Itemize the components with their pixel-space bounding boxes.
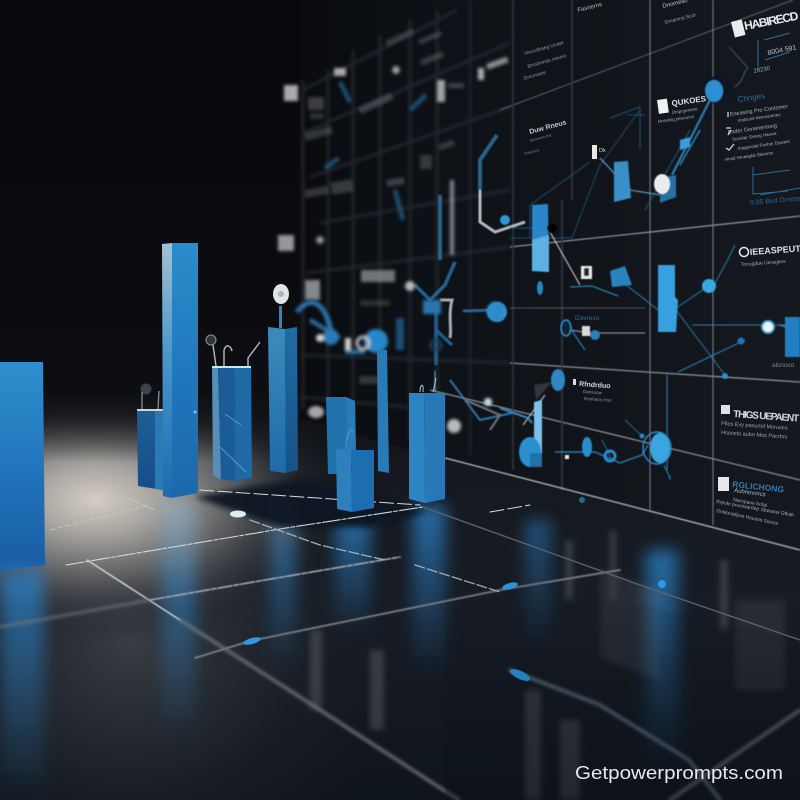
wall text: right small chart: 0.05 Bvd Ornms <box>750 196 800 207</box>
thin bar <box>377 350 389 473</box>
floor blue accents <box>230 497 666 683</box>
wall text: mid right heading <box>740 243 800 268</box>
block node with white disc <box>614 137 690 203</box>
bar: tallest <box>162 243 198 498</box>
wall text: top right details <box>753 33 797 75</box>
bar: eighth <box>409 378 445 503</box>
wall text: right lower heading: THIGS UEPAENT <box>733 409 799 425</box>
pins on bar four <box>206 335 260 366</box>
bar: sixth <box>326 397 356 474</box>
vertical bar node right <box>658 265 678 332</box>
reflections on floor <box>0 490 678 800</box>
blurred far-side wall labels and icons <box>278 28 509 384</box>
wall text: right lower heading: Hsoosto aubn Mos Pacrhrs <box>721 430 788 441</box>
bar: left foreground <box>0 362 45 571</box>
wall text: center labels: Sonenos bur <box>529 132 553 143</box>
wall text: center labels: Davresn <box>575 315 600 322</box>
wall text: right list <box>724 91 791 162</box>
wall text: top right details: 20230 <box>753 66 771 75</box>
wall grid: sharp near side <box>430 0 800 550</box>
wall grid: blurred far side <box>300 0 510 455</box>
small blue components <box>487 266 632 340</box>
wall text: center labels: Gmamnd Scor <box>664 12 697 26</box>
wall text: quad block: QUKOES <box>671 94 707 108</box>
bar: short front <box>336 430 374 512</box>
wall text: bottom right block: RGLICHONG <box>732 479 785 494</box>
watermark: Getpowerprompts.com <box>575 763 783 783</box>
wall text: top right heading <box>731 9 800 38</box>
pins on short bar <box>140 384 159 409</box>
wall text: right lower heading <box>721 405 799 441</box>
wall text: quad block: Hnsslsig pesourcs <box>657 114 695 124</box>
floor <box>0 395 800 800</box>
wall text: center labels <box>523 0 697 322</box>
wall text: top right heading: HABIRECD <box>743 9 800 33</box>
wall text: bottom right block <box>716 477 795 527</box>
wall text: mid right heading: IEEASPEUT <box>749 243 800 257</box>
wall text: right list: Eneasing Pro Contomer <box>729 104 789 118</box>
wall text: quad block: Dmprgement <box>671 106 699 115</box>
reflected wall grid on floor <box>310 530 785 800</box>
wall text: center labels: Brnshnnds meuso <box>527 53 568 70</box>
bar: dark fourth <box>212 366 252 481</box>
wall text: right list: Chnges <box>737 91 766 104</box>
floor grid lines <box>0 490 800 800</box>
wall text: center labels: Fasnerns <box>577 2 603 14</box>
wall text: bottom right block: Rrpole pounwardep Sbwanel Gfloth <box>716 499 795 519</box>
bar with disc node lower <box>519 369 565 467</box>
wall text: top right details: 8004 591 <box>767 45 797 57</box>
blurred nodes mid wall <box>297 281 505 433</box>
bar: fifth with disc <box>268 284 298 473</box>
wall text: lower center note <box>573 379 612 403</box>
wall text: mid right heading: Tonugdue Ueragkes <box>741 259 786 268</box>
network nodes on wall <box>487 75 800 467</box>
right side darkening <box>445 560 800 800</box>
block right edge <box>785 317 800 357</box>
wall text: caption near right block: alsnoco <box>772 362 795 369</box>
floor shadow band <box>195 478 425 527</box>
bar: short left <box>137 409 163 490</box>
node: large blue ring top right <box>705 75 735 105</box>
wall text: bottom right block: Aubnovorcs <box>734 488 766 498</box>
wall text: bottom right block: Naropaue bofal <box>733 497 767 509</box>
wall text: right list: maganolal Pashor Dasses <box>737 139 791 151</box>
wall text: right list: Tsondar Sveng Hawsa <box>731 131 777 142</box>
wall text: center labels: Fesonce <box>524 147 541 156</box>
vertical bar node center <box>500 204 557 272</box>
wall text: bottom right block: Gnslonsllpos Hovans Sorors <box>716 508 779 527</box>
wall text: right list: Hnod Hmeaglal Sbeoms <box>724 150 774 162</box>
wall text: right list: molouse hemsurenes <box>737 112 781 123</box>
white disc node <box>702 279 775 379</box>
wall text: lower center note: Dansuow <box>583 389 603 395</box>
ring nodes lower row <box>565 432 671 464</box>
wall text: center labels: Duw Rneus <box>529 119 567 136</box>
wall panel <box>300 0 800 552</box>
network diagram: pipes on wall, center <box>415 47 800 480</box>
wall text: center labels: Hsnudhaeg Uoaet <box>524 40 565 57</box>
wall text: right lower heading: Pfios Evy pasurlof Moruses <box>721 421 788 432</box>
wall text: center labels: Gmomans <box>523 70 547 82</box>
wall text: lower center note: Ronhaos Hoo <box>584 396 612 403</box>
wall text: center labels: Dk <box>599 148 606 154</box>
wall text: right small chart <box>750 167 800 207</box>
wall text: lower center note: Rfndrduo <box>579 381 611 390</box>
wall text: right list: Ender Genenentong <box>727 123 777 136</box>
wall text: quad block <box>657 94 707 124</box>
